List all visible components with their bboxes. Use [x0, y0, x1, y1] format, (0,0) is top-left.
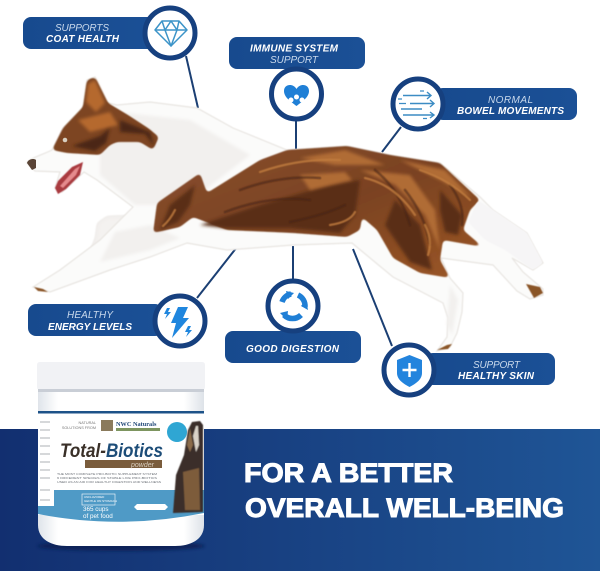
ingredients column	[40, 422, 50, 500]
badge: support healthy skin	[384, 345, 555, 395]
label: HEALTHY	[67, 310, 114, 321]
brand logo: NWC Naturals	[116, 421, 157, 428]
badge: support healthy skin: HEALTHY SKIN	[458, 371, 535, 382]
badge: normal bowel movements: BOWEL MOVEMENTS	[457, 106, 564, 117]
pill	[435, 88, 577, 120]
icon: flow arrows	[398, 91, 434, 118]
badge: healthy energy levels: ENERGY LEVELS	[48, 322, 132, 333]
brand tagline: NATURAL	[79, 421, 96, 425]
dog coat dark areas	[160, 180, 462, 270]
icon: lightning	[164, 307, 192, 338]
badge: supports coat health: COAT HEALTH	[46, 34, 120, 45]
label: IMMUNE SYSTEM	[250, 44, 339, 54]
circle	[272, 69, 322, 119]
serving text	[82, 494, 117, 520]
small description: USED AS AN AID FOR HEALTHY DIGESTION AND WELLNESS	[57, 480, 161, 484]
dog illustration	[27, 77, 543, 351]
badge: good digestion	[225, 281, 361, 363]
label top stripe	[38, 411, 204, 414]
dog coat light fur	[300, 150, 472, 250]
connector lines	[186, 56, 401, 346]
dog mouth	[55, 162, 83, 194]
dog eye	[63, 138, 67, 142]
dog nose	[27, 159, 36, 170]
pill	[425, 353, 555, 385]
icon: shield	[397, 355, 422, 387]
label: SUPPORT	[473, 360, 521, 371]
serving text: of pet food	[83, 513, 113, 520]
serving text: GENTLE ON STOMACH	[84, 499, 117, 503]
NASC seal	[134, 504, 168, 510]
icon: diamond	[155, 21, 187, 46]
headline: FOR A BETTER	[244, 458, 453, 488]
jar lid	[37, 362, 205, 390]
serving text: UNFLAVORED	[84, 495, 105, 499]
circle	[268, 281, 318, 331]
product name: Total-Biotics	[60, 441, 163, 462]
small description: 6 DIFFERENT SPECIES OF STABLE LIVE PRO-BIOTICS	[57, 476, 157, 480]
small description	[57, 472, 161, 484]
label: SUPPORTS	[55, 23, 109, 34]
brand tagline: SOLUTIONS FROM	[62, 426, 96, 430]
icon: heart with paws	[284, 85, 309, 106]
circle	[145, 8, 195, 58]
circle	[155, 296, 205, 346]
label white area	[38, 412, 204, 515]
dog paw marks	[34, 284, 543, 350]
label: GOOD DIGESTION	[246, 344, 340, 355]
label bottom blue panel	[38, 490, 204, 522]
badge: immune system support: SUPPORT	[270, 55, 319, 66]
product jar	[37, 362, 205, 551]
headline: OVERALL WELL-BEING	[245, 493, 564, 523]
teal seal	[167, 422, 187, 442]
dog brown coat	[153, 146, 483, 278]
dog face dark	[72, 120, 154, 151]
badge: healthy energy levels	[28, 296, 205, 346]
powder bar	[85, 460, 162, 468]
dog tail and hind white	[468, 200, 543, 270]
dog tongue highlight	[60, 166, 80, 188]
dog ear highlight	[78, 80, 118, 132]
dog white body	[27, 77, 543, 351]
headline	[244, 458, 564, 523]
jar shadow	[37, 541, 205, 551]
pill	[28, 304, 163, 336]
powder label: powder	[130, 462, 155, 469]
bottom banner	[0, 429, 600, 571]
serving text: 365 cups	[83, 506, 109, 513]
pill	[229, 37, 365, 69]
badge: supports coat health	[23, 8, 195, 58]
label: NORMAL	[488, 95, 533, 106]
icon: recycle arrows	[280, 291, 308, 320]
brand tagline	[62, 421, 96, 430]
badge: normal bowel movements	[393, 79, 577, 129]
dog photo	[173, 421, 203, 513]
pill	[23, 17, 158, 49]
small description: THE MOST COMPLETE PRO-BIOTIC SUPPLEMENT SYSTEM	[57, 472, 158, 476]
badge: immune system support	[229, 37, 365, 119]
brand logo	[101, 420, 160, 431]
dog fur texture	[163, 160, 470, 255]
dog head patch	[52, 77, 159, 155]
dog far front leg	[85, 215, 135, 262]
jar body	[38, 390, 204, 546]
dog body shading	[100, 112, 538, 335]
pill	[225, 331, 361, 363]
circle	[393, 79, 443, 129]
circle	[384, 345, 434, 395]
